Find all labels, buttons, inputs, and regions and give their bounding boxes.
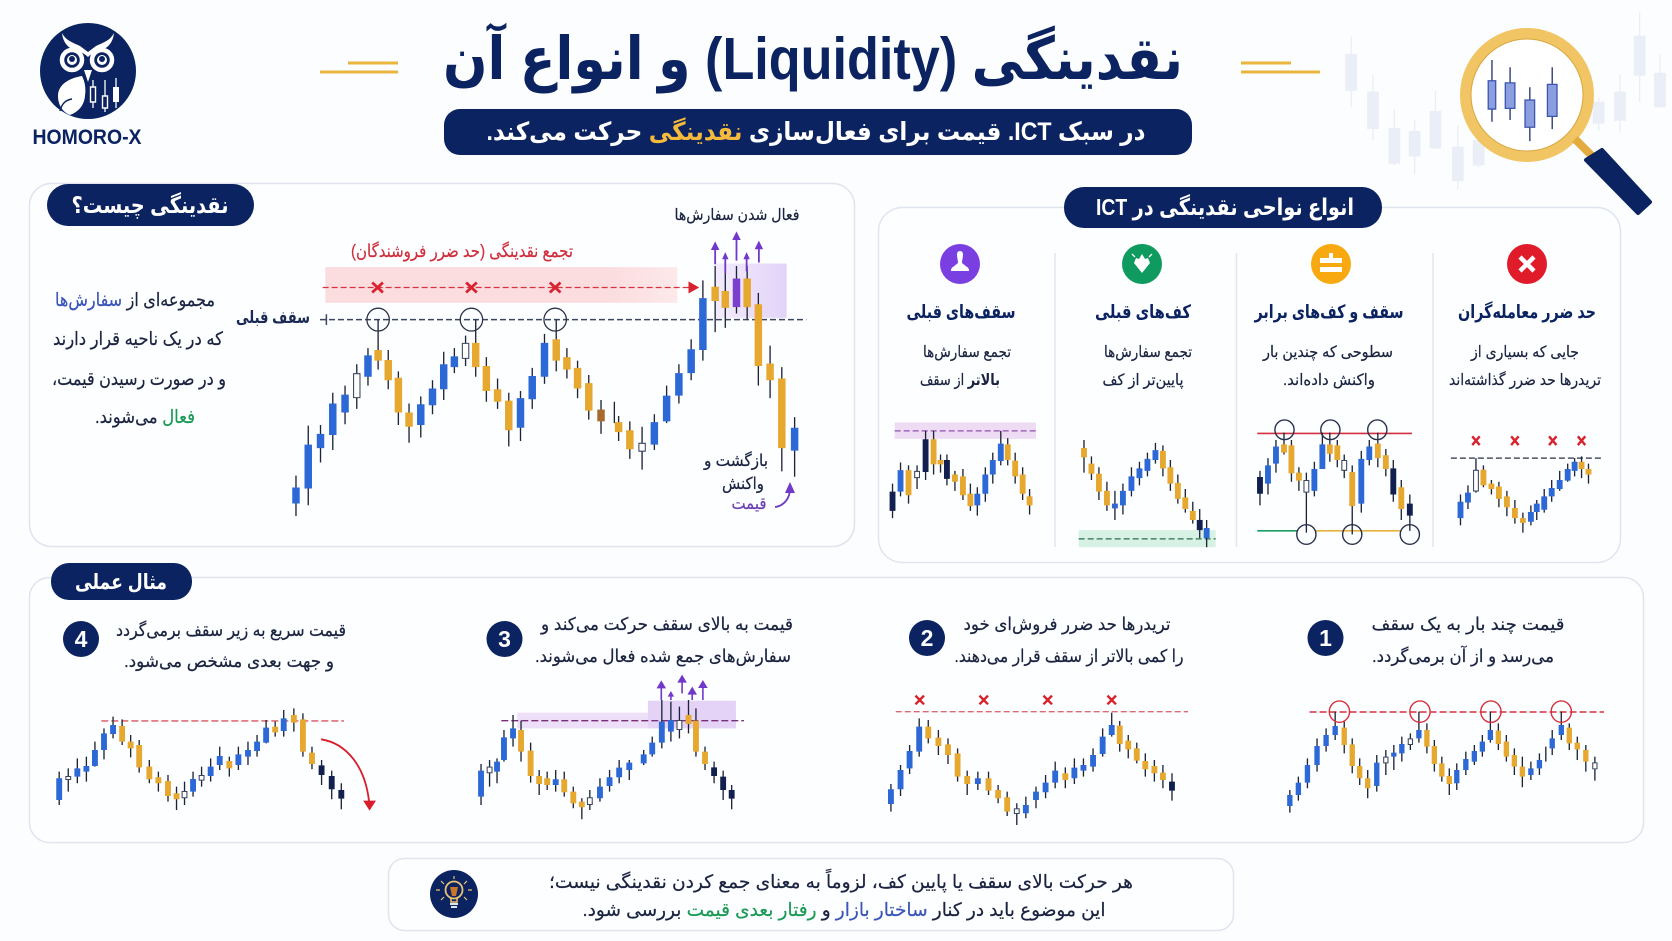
logo [40,23,136,119]
title ornament right [1241,63,1320,72]
step number 1: 1 [1319,625,1332,651]
magnifying glass [1466,34,1650,213]
step text 1 [1372,614,1564,667]
heading: zone types [1064,187,1382,228]
column description: تجمع سفارش‌ها [1104,344,1192,362]
panel: practical example [30,563,1644,842]
definition text: و در صورت رسیدن قیمت، [52,368,226,390]
title ornament left [320,63,398,72]
step text 4: قیمت سریع به زیر سقف برمی‌گردد [116,620,346,641]
column description: تجمع سفارش‌ها [923,344,1011,362]
panel: liquidity zone types [878,187,1620,562]
icon: light bulb [430,870,478,918]
label: price reaction: واکنش [722,475,764,494]
step chart 4 [59,708,376,811]
mini chart: stop losses [1451,436,1603,533]
label: orders triggered: فعال شدن سفارش‌ها [674,207,800,225]
stop-loss cross marks [372,282,560,292]
step text 3 [535,614,793,667]
step 4 [59,620,376,811]
icon: cross [1507,244,1547,284]
column: previous highs [893,244,1036,518]
previous high dashed level [320,314,806,325]
step number 4 [63,621,99,657]
column description: سطوحی که چندین بار [1262,344,1393,361]
step text 3: قیمت به بالای سقف حرکت می‌کند و [540,614,793,635]
column description [920,344,1011,389]
heading: what is liquidity: نقدینگی چیست؟ [72,192,228,219]
column description: تریدرها حد ضرر گذاشته‌اند [1449,371,1601,389]
column heading: سقف و کف‌های برابر [1254,301,1404,323]
icon: star arrow [1122,244,1162,284]
step chart 1 [1290,701,1604,813]
step text 4: و جهت بعدی مشخص می‌شود. [124,651,334,672]
column heading: کف‌های قبلی [1095,301,1191,322]
column description [1262,344,1393,390]
subtitle banner: در سبک ICT. قیمت برای فعال‌سازی نقدینگی حرکت می‌کند. [486,117,1146,147]
step 2 [891,614,1188,825]
step number 3: 3 [498,626,511,652]
column: traders stop losses [1449,244,1603,533]
heading: what is liquidity [47,184,254,226]
column description: پایین‌تر از کف [1102,372,1184,390]
subtitle banner [444,109,1192,155]
column heading: سقف‌های قبلی [906,301,1016,322]
step number 3 [486,621,522,657]
icon: stamp [940,244,980,284]
label: price reaction: قیمت [732,495,766,513]
label: price reaction: بازگشت و [703,451,768,471]
label: liquidity pool: تجمع نقدینگی (حد ضرر فروشندگان) [351,241,573,262]
panel: what is liquidity [30,184,854,546]
step number 1 [1308,620,1344,656]
step number 2: 2 [921,625,933,651]
step 1 [1290,614,1604,813]
circled highs [367,308,566,331]
label: previous high: سقف قبلی [236,308,310,327]
step text 1: می‌رسد و از آن برمی‌گردد. [1372,645,1554,667]
step text 1: قیمت چند بار به یک سقف [1372,614,1564,634]
mini chart: highs [893,423,1036,518]
liquidity pool band [323,264,787,318]
heading: practical example [51,563,192,600]
icon: equals [1311,244,1351,284]
step chart 3 [481,675,744,819]
step text 2: تریدرها حد ضرر فروش‌ای خود [964,614,1171,635]
arrow: price reaction [775,482,795,507]
label: price reaction [703,451,768,513]
note text [549,868,1133,921]
step number 2 [909,620,945,656]
definition text: فعال می‌شوند. [95,406,195,428]
note box [388,858,1234,930]
note text: هر حرکت بالای سقف یا پایین کف، لزوماً به معنای جمع کردن نقدینگی نیست؛ [549,868,1133,893]
definition text [52,289,226,428]
mini chart: equal levels [1257,420,1419,544]
background faded candles [1351,13,1660,189]
title: نقدینگی (Liquidity) و انواع آن [443,22,1183,94]
mini chart: lows [1079,440,1216,547]
logo wordmark: HOMORO-X [32,126,142,149]
column description: جایی که بسیاری از [1470,344,1579,361]
step text 2: را کمی بالاتر از سقف قرار می‌دهند. [954,646,1184,666]
step text 4 [116,620,346,672]
step text 2 [954,614,1184,666]
step number 4: 4 [75,626,88,652]
column description: بالاتر از سقف [920,372,1000,389]
column description: واکنش داده‌اند. [1283,372,1375,390]
column: previous lows [1079,244,1216,547]
column: equal highs and lows [1254,244,1419,544]
heading: practical example: مثال عملی [75,571,167,594]
definition text: که در یک ناحیه قرار دارند [53,328,223,350]
definition text: مجموعه‌ای از سفارش‌ها [55,289,215,311]
candlestick chart: liquidity sweep [296,266,795,516]
order activation arrows [711,231,763,273]
note text: این موضوع باید در کنار ساختار بازار و رفتار بعدی قیمت بررسی شود. [582,899,1106,921]
step text 3: سفارش‌های جمع شده فعال می‌شوند. [535,646,791,667]
column description [1449,344,1601,389]
heading: zone types: انواع نواحی نقدینگی در ICT [1096,194,1354,221]
step 3 [481,614,793,819]
column description [1102,344,1192,390]
column heading: حد ضرر معامله‌گران [1458,301,1596,323]
step chart 2 [891,696,1188,825]
